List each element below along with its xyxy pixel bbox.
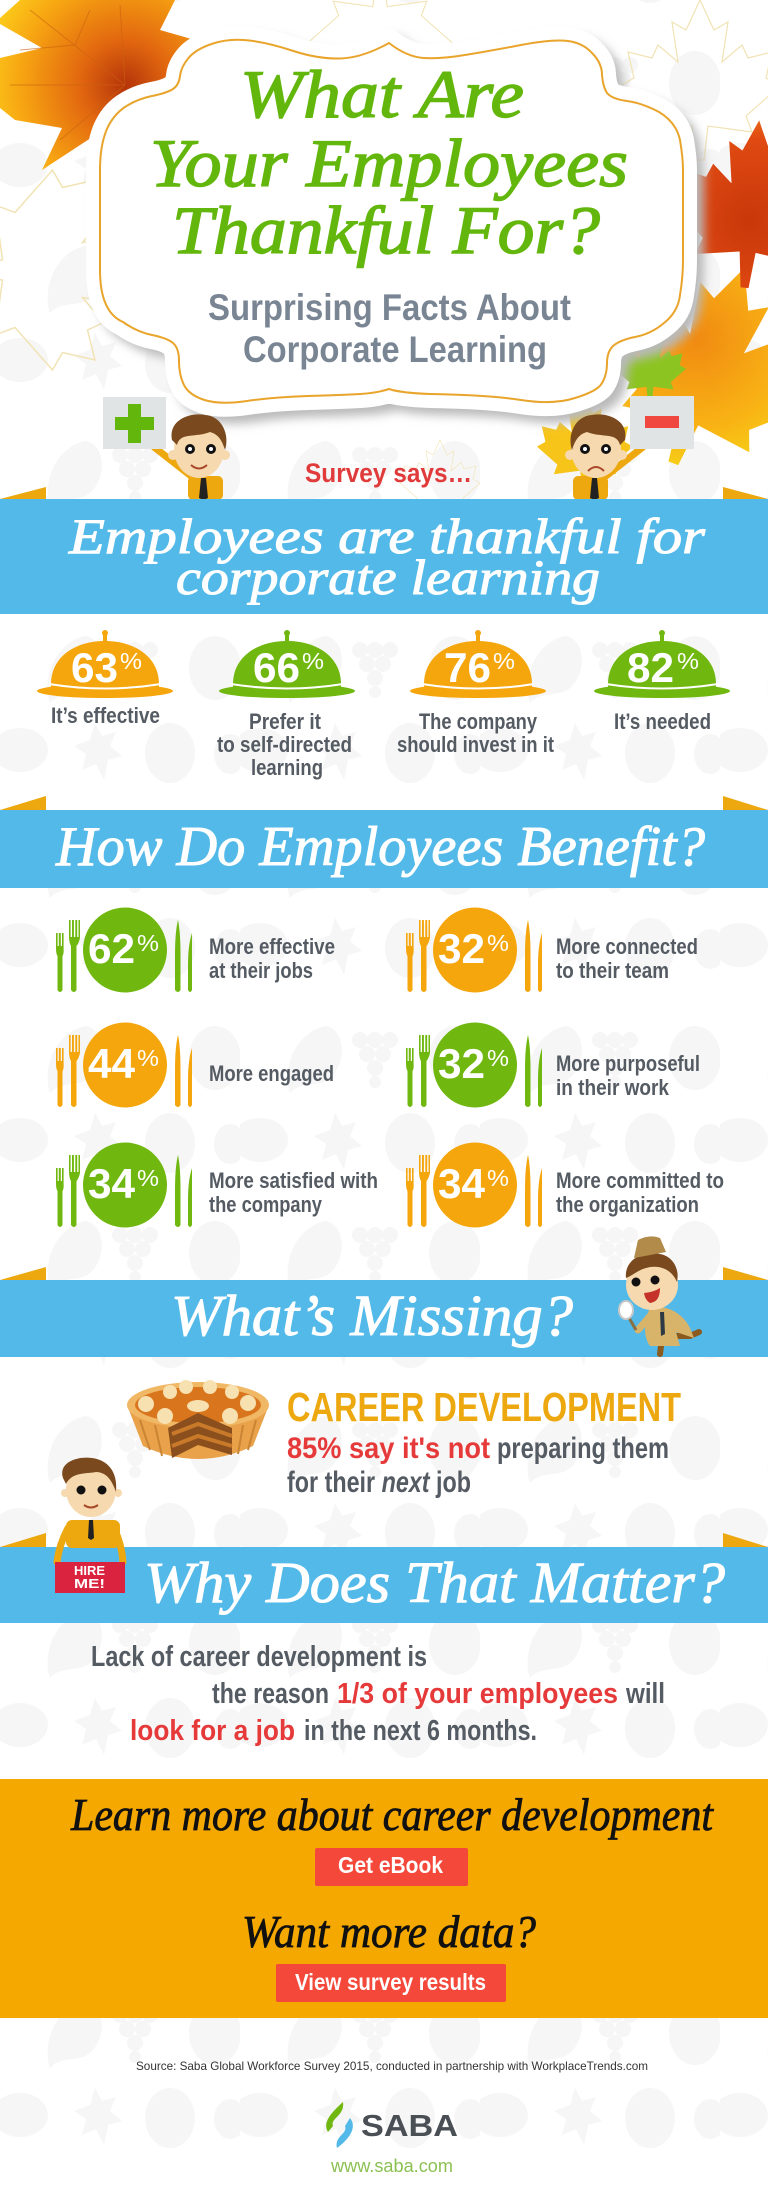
section band: employees are thankful: corporate learning [176,549,600,605]
title plaque [100,40,691,411]
stat: 66% prefer it: 66 [253,644,300,691]
title: Your Employees [150,125,628,201]
saba logo: SABA [361,2108,458,2143]
career development text block [287,1384,681,1499]
benefit: 32% more connected: More connected [556,934,698,959]
icon: pumpkin pie [127,1380,269,1459]
career development text block: for their next job [287,1466,471,1499]
benefit: 34% more satisfied: 34 [88,1160,136,1207]
source note: Source: Saba Global Workforce Survey 2015, conducted in partnership with WorkplaceTrends.com [136,2059,648,2073]
stat: 76% company should invest [397,630,555,757]
subtitle: Corporate Learning [243,329,547,370]
stat: 66% prefer it: learning [251,755,323,780]
benefit: 34% more committed: the organization [556,1192,699,1217]
career development text block: 85% say it's not [287,1432,490,1465]
saba logo [326,2102,458,2148]
section band: how do employees benefit: How Do Employees Benefit? [55,816,705,878]
why it matters text block: Lack of career development is [91,1641,427,1673]
button: view survey results: View survey results [295,1969,486,1995]
benefit: 34% more satisfied: More satisfied with [209,1168,378,1193]
benefit: 44% more engaged [56,1022,334,1108]
section band: why does that matter: Why Does That Matter? [144,1550,725,1615]
stat: 82% it's needed: It’s needed [614,709,711,734]
benefit: 34% more committed: More committed to [556,1168,724,1193]
button: get ebook: Get eBook [338,1852,443,1878]
character: man holding hire me sign: ME! [74,1576,105,1591]
subtitle [208,287,571,370]
button: view survey results [276,1964,506,2002]
character: detective with magnifier [619,1236,699,1354]
stat: 76% company should invest: 76 [444,644,491,691]
benefit: 34% more satisfied: % [137,1165,159,1191]
benefit: 32% more purposeful: in their work [556,1075,670,1100]
header illustration: autumn leaves [0,0,768,520]
benefit: 62% more effective: % [137,930,159,956]
section band: why does that matter [0,1533,768,1623]
benefit: 34% more committed: 34 [438,1160,486,1207]
section band: how do employees benefit [0,796,768,888]
benefit: 62% more effective [56,908,335,992]
stat: 76% company should invest: % [493,648,515,674]
benefit: 62% more effective: at their jobs [209,958,313,983]
why it matters text block [91,1641,665,1747]
benefit: 34% more satisfied [56,1142,378,1228]
section band: what's missing: What’s Missing? [171,1283,573,1348]
character: man holding hire me sign: HIRE [74,1563,105,1578]
benefit: 32% more connected [406,908,698,992]
title: What Are [240,56,524,132]
title: Thankful For? [172,192,600,268]
why it matters text block: look for a job [130,1715,295,1747]
why it matters text block: in the next 6 months. [304,1715,537,1747]
stat: 76% company should invest: The company [419,709,538,734]
benefit: 34% more committed [406,1142,724,1228]
why it matters text block: the reason [212,1678,329,1710]
cta heading: more data: Want more data? [242,1906,536,1957]
benefit: 32% more purposeful: More purposeful [556,1051,700,1076]
website link: www.saba.com [330,2156,453,2176]
stat: 66% prefer it: Prefer it [249,709,322,734]
section band: what's missing [0,1267,768,1357]
section band: employees are thankful [0,487,768,614]
career development text block: preparing them [497,1432,669,1465]
character: sad man with minus sign [565,396,694,500]
benefit: 62% more effective: More effective [209,934,335,959]
stat: 76% company should invest: should invest in it [397,732,555,757]
benefit: 32% more purposeful [406,1022,700,1108]
stat: 63% it's effective: It’s effective [51,703,160,728]
benefit: 32% more connected: 32 [438,925,485,972]
stat: 82% it's needed: 82 [627,644,674,691]
title [150,56,628,268]
stat: 63% it's effective: 63 [71,644,118,691]
benefit: 32% more purposeful: 32 [438,1040,485,1087]
benefit: 44% more engaged: 44 [88,1040,136,1087]
benefit: 32% more connected: to their team [556,958,669,983]
benefit: 32% more purposeful: % [487,1045,509,1071]
stat: 66% prefer it [217,630,355,780]
benefit: 44% more engaged: More engaged [209,1061,334,1086]
benefit: 32% more connected: % [487,930,509,956]
cta heading: career development: Learn more about career development [70,1789,714,1840]
stat: 63% it's effective [37,630,173,728]
why it matters text block: 1/3 of your employees [337,1678,618,1710]
benefit: 34% more satisfied: the company [209,1192,323,1217]
stat: 63% it's effective: % [120,648,142,674]
benefit: 44% more engaged: % [137,1045,159,1071]
stat: 82% it's needed: % [677,648,699,674]
button: get ebook [315,1848,468,1886]
benefit: 62% more effective: 62 [88,925,135,972]
character: man holding hire me sign [55,1458,125,1593]
why it matters text block: will [625,1678,665,1710]
stat: 66% prefer it: to self-directed [217,732,352,757]
subtitle: Surprising Facts About [208,287,571,328]
stat: 66% prefer it: % [302,648,324,674]
benefit: 34% more committed: % [487,1165,509,1191]
stat: 82% it's needed [594,630,730,734]
section band: employees are thankful: Employees are thankful for [68,508,706,564]
survey says label: Survey says… [305,458,472,488]
character: happy man with plus sign [103,397,230,500]
call to action panel [0,1779,768,2018]
